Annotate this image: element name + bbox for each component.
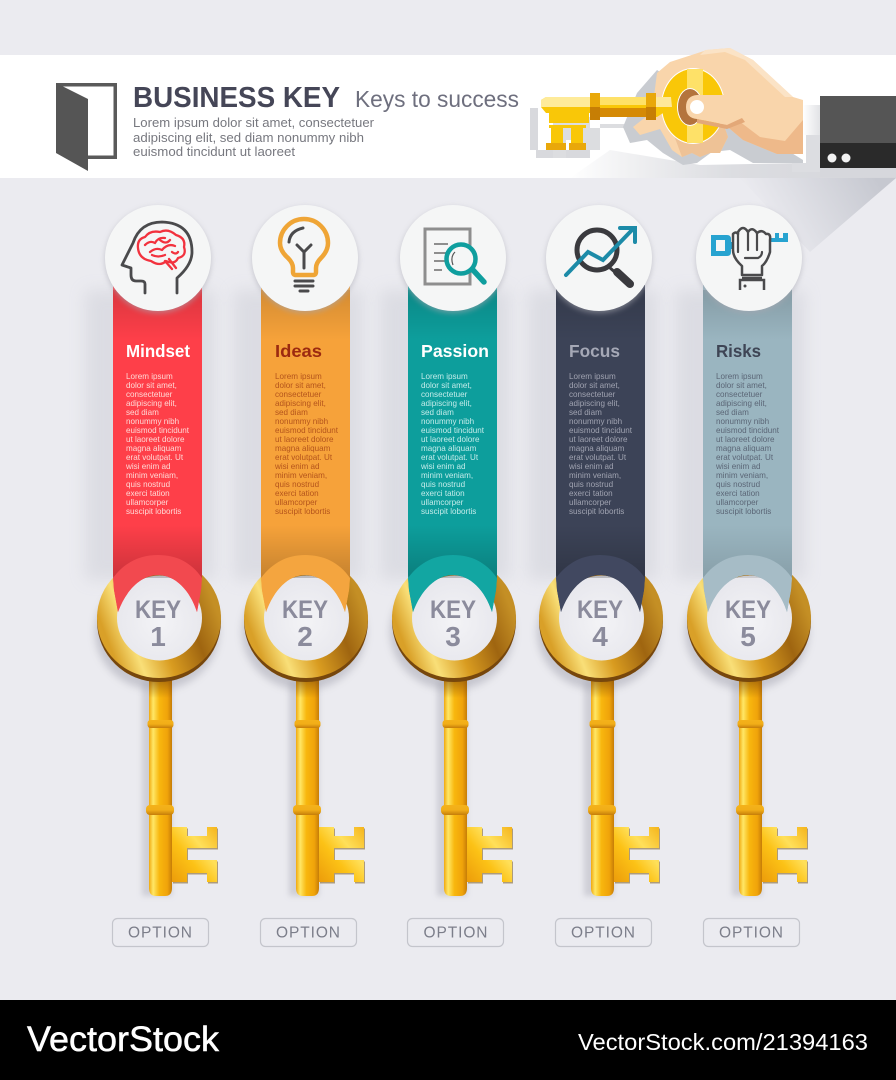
title: BUSINESS KEY [133,82,340,114]
body text: minim veniam, [716,471,768,480]
body text: nonummy nibh [569,417,622,426]
option button [260,918,356,946]
body text: suscipit lobortis [569,507,624,516]
body text: suscipit lobortis [421,507,476,516]
body text: consectetuer [716,390,763,399]
footer logo: VectorStock [27,1020,220,1059]
body text: sed diam [421,408,454,417]
body text: Lorem ipsum [716,372,763,381]
header description: Lorem ipsum dolor sit amet, consectetuer [133,115,375,130]
body text: wisi enim ad [125,462,171,471]
option button [704,918,800,946]
body text: minim veniam, [421,471,473,480]
body text: suscipit lobortis [716,507,771,516]
icon circle: document with magnifier [400,205,506,313]
header band [0,55,896,178]
body text: sed diam [275,408,308,417]
long shadow below header [740,178,896,252]
body text: exerci tation [421,489,465,498]
body text: ut laoreet dolore [569,435,628,444]
key label: KEY [577,596,623,624]
body text: suscipit lobortis [275,507,330,516]
header description: euismod tincidunt ut laoreet [133,144,295,159]
footer url: VectorStock.com/21394163 [578,1029,868,1055]
body text: wisi enim ad [274,462,320,471]
header description: adipiscing elit, sed diam nonummy nibh [133,130,364,145]
body text: consectetuer [126,390,173,399]
body text: erat volutpat. Ut [275,453,333,462]
body text: euismod tincidunt [716,426,780,435]
key number: 3 [445,621,461,652]
body text: dolor sit amet, [716,381,767,390]
body text: nonummy nibh [275,417,328,426]
body text: erat volutpat. Ut [421,453,479,462]
body text: adipiscing elit, [275,399,326,408]
body text: Lorem ipsum [275,372,322,381]
long shadow inside header [570,150,896,178]
body text: dolor sit amet, [275,381,326,390]
option button [408,918,504,946]
illustration: hand holding golden key [530,48,820,172]
body text: ullamcorper [275,498,318,507]
heading: Risks [716,341,761,361]
body text: ut laoreet dolore [421,435,480,444]
panel: key 5 Risks [675,205,811,946]
icon circle: light bulb [252,205,358,313]
body text: ullamcorper [421,498,464,507]
body text: erat volutpat. Ut [126,453,184,462]
body text: ut laoreet dolore [716,435,775,444]
body text: euismod tincidunt [421,426,485,435]
body text: adipiscing elit, [716,399,767,408]
body text: magna aliquam [421,444,477,453]
body text: minim veniam, [275,471,327,480]
body text: ullamcorper [716,498,759,507]
panel: key 1 Mindset [85,205,221,946]
body text: adipiscing elit, [126,399,177,408]
body text: exerci tation [275,489,319,498]
body text: magna aliquam [275,444,331,453]
icon circle: head with brain [105,205,211,313]
body text: nonummy nibh [716,417,769,426]
key label: KEY [430,596,476,624]
body text: sed diam [716,408,749,417]
body text: suscipit lobortis [126,507,181,516]
body text: quis nostrud [421,480,465,489]
body text: quis nostrud [275,480,319,489]
body text: ut laoreet dolore [275,435,334,444]
key label: KEY [282,596,328,624]
key number: 2 [297,621,313,652]
heading: Mindset [126,341,190,361]
key label: KEY [725,596,771,624]
body text: adipiscing elit, [421,399,472,408]
body text: Lorem ipsum [126,372,173,381]
option button: OPTION [719,924,783,942]
body text: ullamcorper [126,498,169,507]
body text: wisi enim ad [420,462,466,471]
body text: Lorem ipsum [421,372,468,381]
key number: 1 [150,621,166,652]
body text: sed diam [126,408,159,417]
icon circle: magnifier with growth arrow [546,205,652,313]
body text: euismod tincidunt [275,426,339,435]
body text: wisi enim ad [568,462,614,471]
option button: OPTION [128,924,192,942]
key number: 5 [740,621,756,652]
body text: quis nostrud [716,480,760,489]
body text: nonummy nibh [421,417,474,426]
body text: exerci tation [126,489,170,498]
body text: consectetuer [421,390,468,399]
body text: ullamcorper [569,498,612,507]
option button [556,918,652,946]
heading: Focus [569,341,620,361]
body text: dolor sit amet, [421,381,472,390]
panel: key 2 Ideas [233,205,368,946]
heading: Ideas [275,341,322,361]
body text: euismod tincidunt [126,426,190,435]
body text: erat volutpat. Ut [716,453,774,462]
key number: 4 [592,621,608,652]
panel: key 3 Passion [380,205,516,946]
body text: dolor sit amet, [126,381,177,390]
body text: euismod tincidunt [569,426,633,435]
body text: consectetuer [569,390,616,399]
icon: open door [56,83,117,171]
panel: key 4 Focus [528,205,663,946]
icon circle: fist holding key [696,205,802,313]
heading: Passion [421,341,489,361]
body text: nonummy nibh [126,417,179,426]
option button: OPTION [276,924,340,942]
body text: erat volutpat. Ut [569,453,627,462]
footer bar [0,1000,896,1080]
option button: OPTION [571,924,635,942]
header description [133,115,375,159]
body text: minim veniam, [126,471,178,480]
body text: exerci tation [716,489,760,498]
option button [112,918,208,946]
body text: ut laoreet dolore [126,435,185,444]
body text: magna aliquam [569,444,625,453]
body text: quis nostrud [569,480,613,489]
option button: OPTION [424,924,488,942]
body text: minim veniam, [569,471,621,480]
body text: wisi enim ad [715,462,761,471]
key label: KEY [135,596,181,624]
body text: sed diam [569,408,602,417]
body text: adipiscing elit, [569,399,620,408]
body text: exerci tation [569,489,613,498]
body text: Lorem ipsum [569,372,616,381]
body text: magna aliquam [716,444,772,453]
body text: magna aliquam [126,444,182,453]
subtitle: Keys to success [355,86,519,112]
body text: dolor sit amet, [569,381,620,390]
body text: consectetuer [275,390,322,399]
sleeve with buttons [820,96,896,177]
body text: quis nostrud [126,480,170,489]
